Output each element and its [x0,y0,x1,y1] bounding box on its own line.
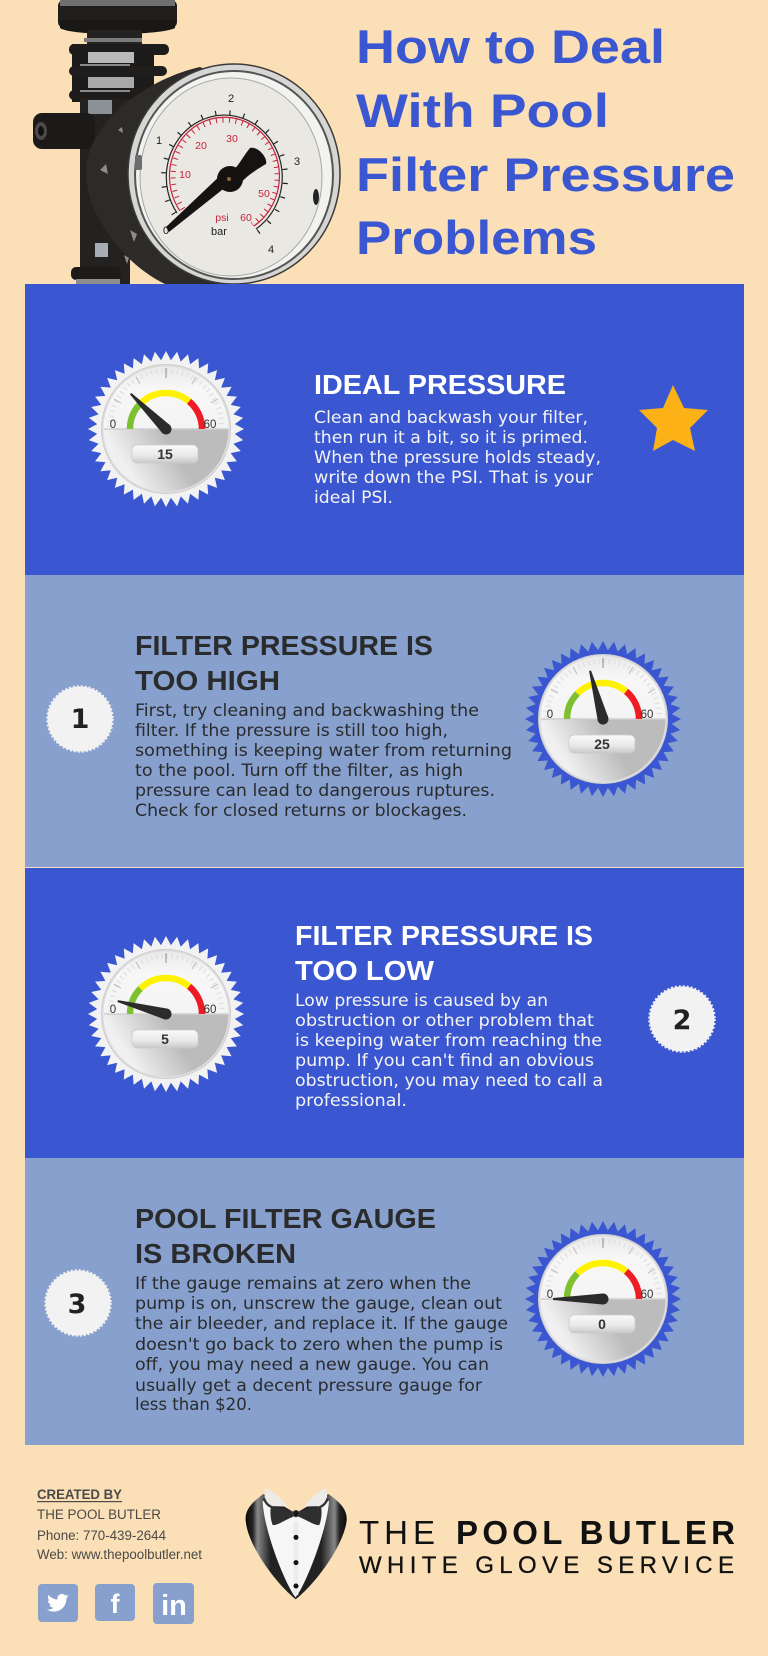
panel: filter pressure too high [25,575,744,867]
text: too high [135,701,512,820]
text: too low: obstruction, you may need to call a [295,1071,603,1090]
text: too low: pump. If you can't find an obvious [295,1051,594,1070]
text: too high: Check for closed returns or blockages. [135,801,467,820]
credits: THE POOL BUTLER [37,1507,161,1522]
gauge reading 0 [525,1221,681,1377]
gauge reading 15: 0 [110,419,116,431]
text: too low: is keeping water from reaching the [295,1031,602,1050]
icon: facebook [95,1584,135,1621]
photo: pressure gauge on a pipe: 2 [228,93,234,105]
title: How to Deal [356,21,665,74]
title: Problems [356,212,597,265]
photo: pressure gauge on a pipe: 0 [163,225,169,237]
text: too high: pressure can lead to dangerous ruptures. [135,781,495,800]
photo: pressure gauge on a pipe: 10 [179,169,191,181]
gauge reading 5: 5 [161,1031,169,1047]
panel: gauge is broken [25,1158,744,1445]
text: ideal pressure: When the pressure holds steady, [314,448,601,467]
icon: twitter [38,1584,78,1622]
text: ideal pressure: Clean and backwash your filter, [314,408,588,427]
gauge reading 5: 60 [204,1004,216,1016]
photo: pressure gauge on a pipe: 20 [195,140,207,152]
heading: broken: POOL FILTER GAUGE [135,1203,436,1234]
text: broken: usually get a decent pressure gauge for [135,1376,482,1395]
panel: ideal pressure [25,284,744,575]
heading: too low: TOO LOW [295,955,435,986]
panel: filter pressure too low [25,868,744,1158]
text: ideal pressure: write down the PSI. That is your [314,468,593,487]
gauge reading 15: 15 [157,446,173,462]
text: too high: First, try cleaning and backwashing the [135,701,479,720]
text: broken [135,1274,508,1414]
heading: too high [135,630,433,696]
photo: pressure gauge on a pipe: bar [211,226,227,238]
logo: wordmark [359,1514,735,1579]
credits [37,1487,202,1562]
badge 1: 1 [71,704,89,735]
text: too low: obstruction or other problem that [295,1011,595,1030]
photo: pressure gauge on a pipe: 1 [156,135,162,147]
text: too low: Low pressure is caused by an [295,991,548,1010]
title [356,21,735,265]
photo: pressure gauge on a pipe [33,0,340,284]
text: ideal pressure: ideal PSI. [314,488,393,507]
gauge reading 0: 0 [598,1316,606,1332]
badge 2 [649,986,715,1052]
text: broken: pump is on, unscrew the gauge, clean out [135,1294,503,1313]
logo: wordmark: THE [359,1514,435,1551]
gauge reading 25: 0 [547,709,553,721]
icon: linkedin [153,1583,194,1624]
icon: facebook: f [110,1589,120,1619]
credits: CREATED BY [37,1487,122,1502]
icon: star [639,385,708,451]
photo: pressure gauge on a pipe: 60 [240,212,252,224]
text: broken: doesn't go back to zero when the pump is [135,1335,503,1354]
gauge reading 0: 60 [641,1289,653,1301]
photo: pressure gauge on a pipe: 30 [226,133,238,145]
badge 3 [45,1270,111,1336]
text: ideal pressure: then run it a bit, so it is primed. [314,428,588,447]
heading: ideal pressure: IDEAL PRESSURE [314,369,566,400]
title: Filter Pressure [356,149,735,202]
badge 2: 2 [673,1005,691,1036]
photo: pressure gauge on a pipe: 3 [294,156,300,168]
gauge reading 15: 60 [204,419,216,431]
photo: pressure gauge on a pipe: psi [215,212,229,224]
heading: too high: FILTER PRESSURE IS [135,630,433,661]
badge 3: 3 [68,1289,86,1320]
photo: pressure gauge on a pipe: 50 [258,188,270,200]
gauge reading 5 [88,936,244,1092]
gauge reading 15 [88,351,244,507]
heading: broken [135,1203,436,1269]
heading: too low: FILTER PRESSURE IS [295,920,593,951]
gauge reading 25 [525,641,681,797]
heading: too low [295,920,593,986]
text: too high: filter. If the pressure is still too high, [135,721,448,740]
credits: Web: www.thepoolbutler.net [37,1547,202,1562]
gauge reading 25: 25 [594,736,610,752]
photo: pressure gauge on a pipe: 4 [268,244,274,256]
credits: Phone: 770-439-2644 [37,1528,166,1543]
logo: tuxedo [246,1488,347,1599]
title: With Pool [356,85,609,138]
text: ideal pressure [314,408,601,507]
text: broken: the air bleeder, and replace it. If the gauge [135,1314,508,1333]
heading: broken: IS BROKEN [135,1238,296,1269]
heading: too high: TOO HIGH [135,665,280,696]
logo: wordmark: WHITE GLOVE SERVICE [359,1552,734,1579]
text: broken: less than $20. [135,1395,252,1414]
text: too low: professional. [295,1091,407,1110]
text: broken: off, you may need a new gauge. You can [135,1355,489,1374]
logo: wordmark: POOL BUTLER [456,1514,735,1551]
icon: linkedin: in [161,1590,187,1622]
gauge reading 0: 0 [547,1289,553,1301]
text: broken: If the gauge remains at zero when the [135,1274,471,1293]
gauge reading 25: 60 [641,709,653,721]
text: too high: to the pool. Turn off the filter, as high [135,761,463,780]
text: too high: something is keeping water from returning [135,741,512,760]
text: too low [295,991,603,1110]
badge 1 [47,686,113,752]
gauge reading 5: 0 [110,1004,116,1016]
